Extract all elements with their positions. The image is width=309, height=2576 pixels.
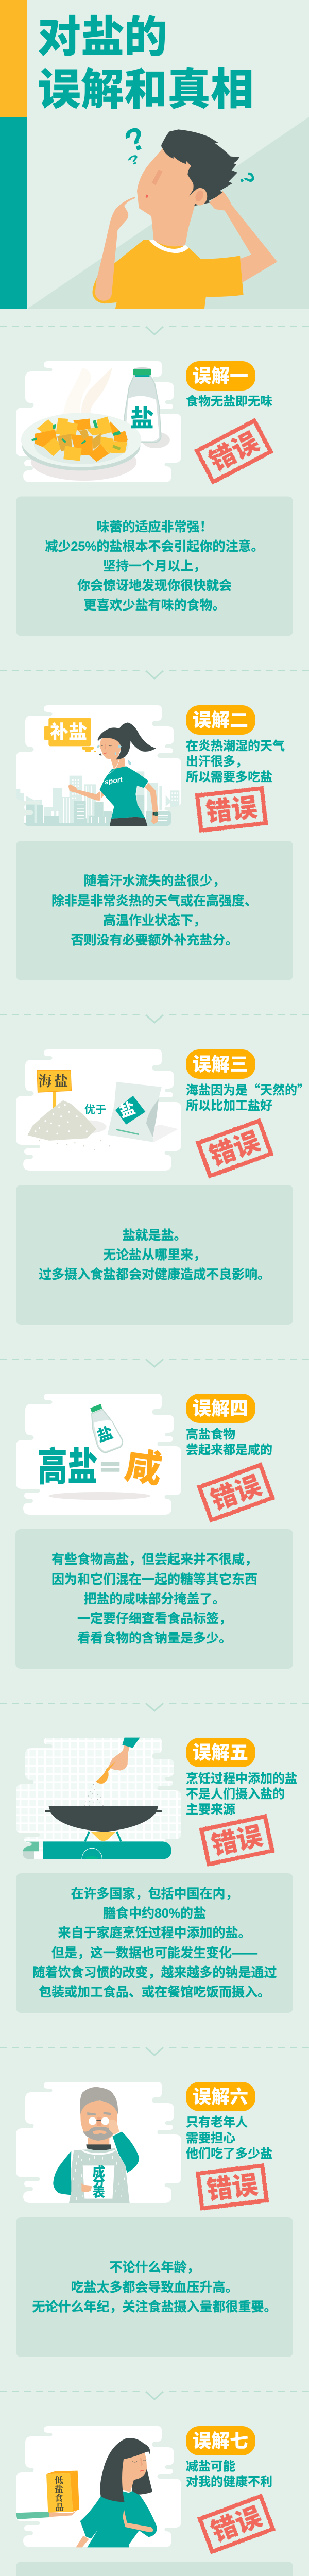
claim text: 所以需要多吃盐 (186, 770, 272, 784)
panel: truth 5: 包装或加工食品、或在餐馆吃饭而摄入。 (39, 1985, 270, 1999)
claim text: 在炎热潮湿的天气 (186, 739, 285, 753)
panel: truth 1: 你会惊讶地发现你很快就会 (77, 579, 232, 593)
pill: myth 4: 误解四 (193, 1398, 248, 1419)
section: myth 6 (16, 2082, 293, 2357)
pill: myth 7 (186, 2426, 255, 2455)
panel: truth 1: 更喜欢少盐有味的食物。 (83, 598, 226, 613)
bottle label: 盐 (95, 1425, 115, 1445)
background triangle (27, 117, 309, 309)
illustration: older man reading label (16, 2082, 181, 2203)
pill: myth 7: 误解七 (193, 2430, 248, 2451)
panel: truth 5: 随着饮食习惯的改变，越来越多的钠是通过 (32, 1965, 277, 1980)
claim text: 食物无盐即无味 (186, 394, 272, 409)
yellow side bar (0, 0, 27, 117)
stamp: wrong: 错误 (207, 1471, 265, 1515)
pill: myth 2: 误解二 (193, 709, 248, 731)
icon: right question mark: ? (234, 169, 259, 189)
claim text: 海盐因为是“天然的” (186, 1080, 309, 1098)
stamp: wrong (197, 421, 271, 482)
claim text: 对我的健康不利 (186, 2475, 272, 2489)
divider arrow (0, 2392, 309, 2399)
claim text: 出汗很多， (186, 755, 248, 769)
panel: truth 4: 把盐的咸味部分掩盖了。 (83, 1592, 226, 1606)
panel: truth 5 (16, 1873, 293, 2013)
claim text: 高盐食物 (186, 1427, 235, 1442)
panel: truth 4 (15, 1529, 293, 1669)
claim text: 需要担心 (186, 2131, 235, 2145)
claim text: 不是人们摄入盐的 (186, 1787, 285, 1801)
panel: truth 2: 除非是非常炎热的天气或在高强度、 (52, 893, 258, 908)
divider arrow (0, 1703, 309, 1711)
bottle label: 盐 (130, 405, 153, 432)
speech bubble (44, 718, 96, 752)
stamp: wrong (199, 1465, 272, 1520)
stamp: wrong (197, 788, 266, 831)
panel: truth 5: 膳食中约80%的盐 (103, 1906, 206, 1921)
panel: truth 1: 减少25%的盐根本不会引起你的注意。 (45, 539, 264, 554)
pill: myth 4 (186, 1394, 255, 1423)
panel: truth 2: 高温作业状态下， (103, 913, 206, 928)
stamp: wrong (201, 1817, 272, 1864)
stamp: wrong (200, 2496, 273, 2552)
panel: truth 4: 因为和它们混在一起的糖等其它东西 (52, 1572, 258, 1587)
illustration: thinking man (93, 120, 277, 309)
pill: myth 3: 误解三 (193, 1054, 248, 1075)
section: myth 1 (16, 361, 293, 636)
claim text: 尝起来都是咸的 (186, 1443, 272, 1457)
section: myth 7 (16, 2426, 293, 2576)
pill: myth 1 (186, 361, 255, 391)
panel: truth 6 (16, 2217, 293, 2357)
stamp: wrong: 错误 (204, 427, 264, 477)
label: ingredients list: 分 (92, 2175, 105, 2190)
claim text: 只有老年人 (186, 2115, 248, 2129)
big text: high salt: 高盐 (38, 1446, 97, 1489)
stamp: wrong (198, 1121, 271, 1176)
panel: truth 4: 有些食物高盐，但尝起来并不很咸， (52, 1552, 258, 1567)
label: 优于 (84, 1104, 106, 1116)
panel: truth 3: 过多摄入食盐都会对健康造成不良影响。 (39, 1267, 270, 1282)
pill: myth 5 (186, 1738, 255, 1767)
panel: truth 1: 味蕾的适应非常强！ (96, 519, 213, 534)
panel: truth 7 (16, 2562, 293, 2576)
pill: myth 2 (186, 705, 255, 735)
panel: truth 6: 不论什么年龄， (109, 2260, 200, 2275)
divider arrow (0, 1359, 309, 1367)
stamp: wrong: 错误 (204, 793, 259, 827)
divider arrow (0, 327, 309, 334)
icon: question mark: ? (119, 120, 152, 160)
illustration: woman refusing low-salt food (16, 2426, 181, 2547)
illustration: dish and salt bottle (16, 361, 181, 482)
section: myth 2 (15, 705, 293, 980)
panel: truth 2 (16, 841, 293, 980)
shirt label: sport (104, 775, 124, 786)
big text: salty: 咸 (122, 1445, 165, 1491)
panel: truth 2: 随着汗水流失的盐很少， (83, 874, 226, 888)
illustration: high salt equals salty (16, 1394, 181, 1515)
panel: truth 5: 在许多国家，包括中国在内， (71, 1887, 238, 1901)
box label: 低 (55, 2475, 63, 2485)
header panel (0, 0, 309, 309)
title: 误解和真相 (38, 65, 254, 114)
sign text: 海盐 (38, 1073, 70, 1089)
panel: truth 2: 否则没有必要额外补充盐分。 (71, 933, 238, 947)
panel: truth 3: 无论盐从哪里来， (103, 1248, 206, 1262)
panel: truth 1: 坚持一个月以上， (103, 559, 206, 573)
stamp: wrong (198, 2166, 267, 2208)
panel: truth 1 (16, 497, 293, 636)
panel: truth 4: 一定要仔细查看食品标签， (77, 1611, 232, 1626)
panel: truth 6: 吃盐太多都会导致血压升高。 (71, 2280, 238, 2295)
panel: truth 5: 但是，这一数据也可能发生变化—— (52, 1946, 258, 1960)
divider arrow (0, 1015, 309, 1023)
pill: myth 5: 误解五 (193, 1742, 248, 1763)
panel: truth 6: 无论什么年纪，关注食盐摄入量都很重要。 (32, 2299, 277, 2314)
panel: truth 4: 看看食物的含钠量是多少。 (77, 1631, 232, 1646)
illustration: salting a wok (16, 1738, 181, 1859)
pill: myth 6 (186, 2082, 255, 2111)
pill: myth 6: 误解六 (193, 2086, 248, 2107)
pill: myth 1: 误解一 (193, 365, 248, 386)
panel: truth 3: 盐就是盐。 (122, 1228, 187, 1243)
illustration: sea salt and salt bag (16, 1049, 181, 1171)
bubble text: 补盐 (50, 721, 87, 742)
divider arrow (0, 2047, 309, 2055)
claim text: 减盐可能 (186, 2460, 235, 2473)
claim text: 烹饪过程中添加的盐 (186, 1771, 297, 1786)
box label: 食 (55, 2494, 63, 2503)
stamp: wrong: 错误 (208, 2502, 266, 2547)
section: myth 3 (16, 1049, 309, 1325)
box label: 品 (56, 2503, 64, 2513)
section: myth 4 (15, 1394, 293, 1669)
panel: truth 5: 来自于家庭烹饪过程中添加的盐。 (58, 1925, 251, 1940)
title: 对盐的 (38, 13, 167, 61)
section: myth 5 (16, 1738, 297, 2013)
divider arrow (0, 671, 309, 679)
label: ingredients list: 成 (92, 2164, 105, 2179)
teal side bar (0, 117, 27, 309)
label: ingredients list: 表 (92, 2185, 105, 2200)
bag label: 盐 (117, 1099, 138, 1121)
illustration: runner (15, 705, 181, 826)
pill: myth 3 (186, 1049, 255, 1079)
claim text: 主要来源 (186, 1803, 235, 1817)
stamp: wrong: 错误 (205, 1127, 264, 1171)
box label: 盐 (55, 2484, 64, 2494)
stamp: wrong: 错误 (205, 2170, 260, 2205)
claim text: 所以比加工盐好 (186, 1095, 272, 1113)
panel: truth 3 (16, 1185, 293, 1325)
icon: small question mark: ? (126, 151, 142, 169)
claim text: 他们吃了多少盐 (186, 2147, 272, 2161)
stamp: wrong: 错误 (209, 1821, 265, 1860)
